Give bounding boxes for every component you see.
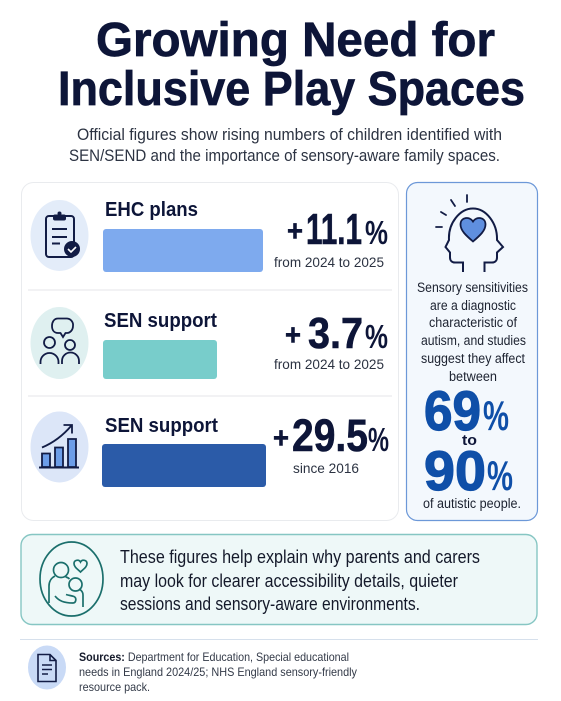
text: sources <box>79 650 357 694</box>
value: 90% <box>424 439 513 502</box>
value: +3.7%: % <box>365 318 388 355</box>
bar: SEN support <box>103 340 217 379</box>
value: +3.7%: 3.7 <box>308 309 363 358</box>
value: +11.1%: 11.1 <box>306 205 362 254</box>
value: +29.5%: 29.5 <box>292 410 368 461</box>
icon: people talking <box>30 307 88 379</box>
icon: document <box>28 646 66 690</box>
text: callout message: sessions and sensory-aware environments. <box>120 594 420 614</box>
value: +3.7% <box>285 309 388 358</box>
text: to: to <box>462 432 477 449</box>
value: 69%: 69 <box>424 379 481 442</box>
text: sensory description: characteristic of <box>429 315 517 330</box>
text: sources: resource pack. <box>79 680 150 694</box>
caption: from 2024 to 2025: from 2024 to 2025 <box>274 254 384 270</box>
text: sensory description: are a diagnostic <box>430 298 516 313</box>
title: Inclusive Play Spaces <box>58 63 525 116</box>
caption: from 2024 to 2025: from 2024 to 2025 <box>274 356 384 372</box>
text: sensory description: autism, and studies <box>421 333 526 348</box>
caption: of autistic people: of autistic people. <box>423 496 521 511</box>
callout: why it matters <box>21 534 537 624</box>
text: callout message: may look for clearer accessibility details, quieter <box>120 571 458 591</box>
subtitle <box>69 126 502 165</box>
text: sources: Sources: Department for Education, Special educational <box>79 650 349 664</box>
text: sensory description: suggest they affect <box>421 351 525 366</box>
panel: statistics <box>22 182 398 520</box>
value: 90%: 90 <box>424 439 486 502</box>
heading: EHC plans: EHC plans <box>105 198 198 221</box>
value: 69%: % <box>483 392 509 439</box>
icon: clipboard <box>30 200 88 271</box>
bar: SEN support since 2016 <box>102 444 266 487</box>
text: sensory description: between <box>449 369 497 384</box>
title: Growing Need for <box>96 14 495 67</box>
text: sensory description <box>417 280 528 384</box>
text: sensory description: Sensory sensitivities <box>417 280 528 295</box>
bar: EHC plans <box>103 229 263 272</box>
icon: head with heart <box>436 195 503 272</box>
value: +29.5%: % <box>368 421 389 458</box>
value: +29.5%: + <box>273 422 289 455</box>
panel: sensory sensitivities <box>406 182 538 520</box>
subtitle: Official figures show rising numbers of children identified with <box>77 126 502 144</box>
heading: SEN support: SEN support <box>104 309 217 332</box>
text: callout message <box>120 547 480 614</box>
value: +11.1%: % <box>365 214 388 251</box>
caption: since 2016: since 2016 <box>293 460 359 476</box>
text: callout message: These figures help explain why parents and carers <box>120 547 480 567</box>
heading: SEN support: SEN support <box>105 414 218 437</box>
subtitle: SEN/SEND and the importance of sensory-aware family spaces. <box>69 147 500 165</box>
text: sources: needs in England 2024/25; NHS England sensory-friendly <box>79 665 357 679</box>
icon: parent and child <box>40 542 103 616</box>
value: 90%: % <box>487 452 513 499</box>
value: +3.7%: + <box>285 319 301 352</box>
title <box>58 14 525 116</box>
value: +11.1%: + <box>287 215 303 248</box>
icon: growth chart <box>30 412 88 482</box>
